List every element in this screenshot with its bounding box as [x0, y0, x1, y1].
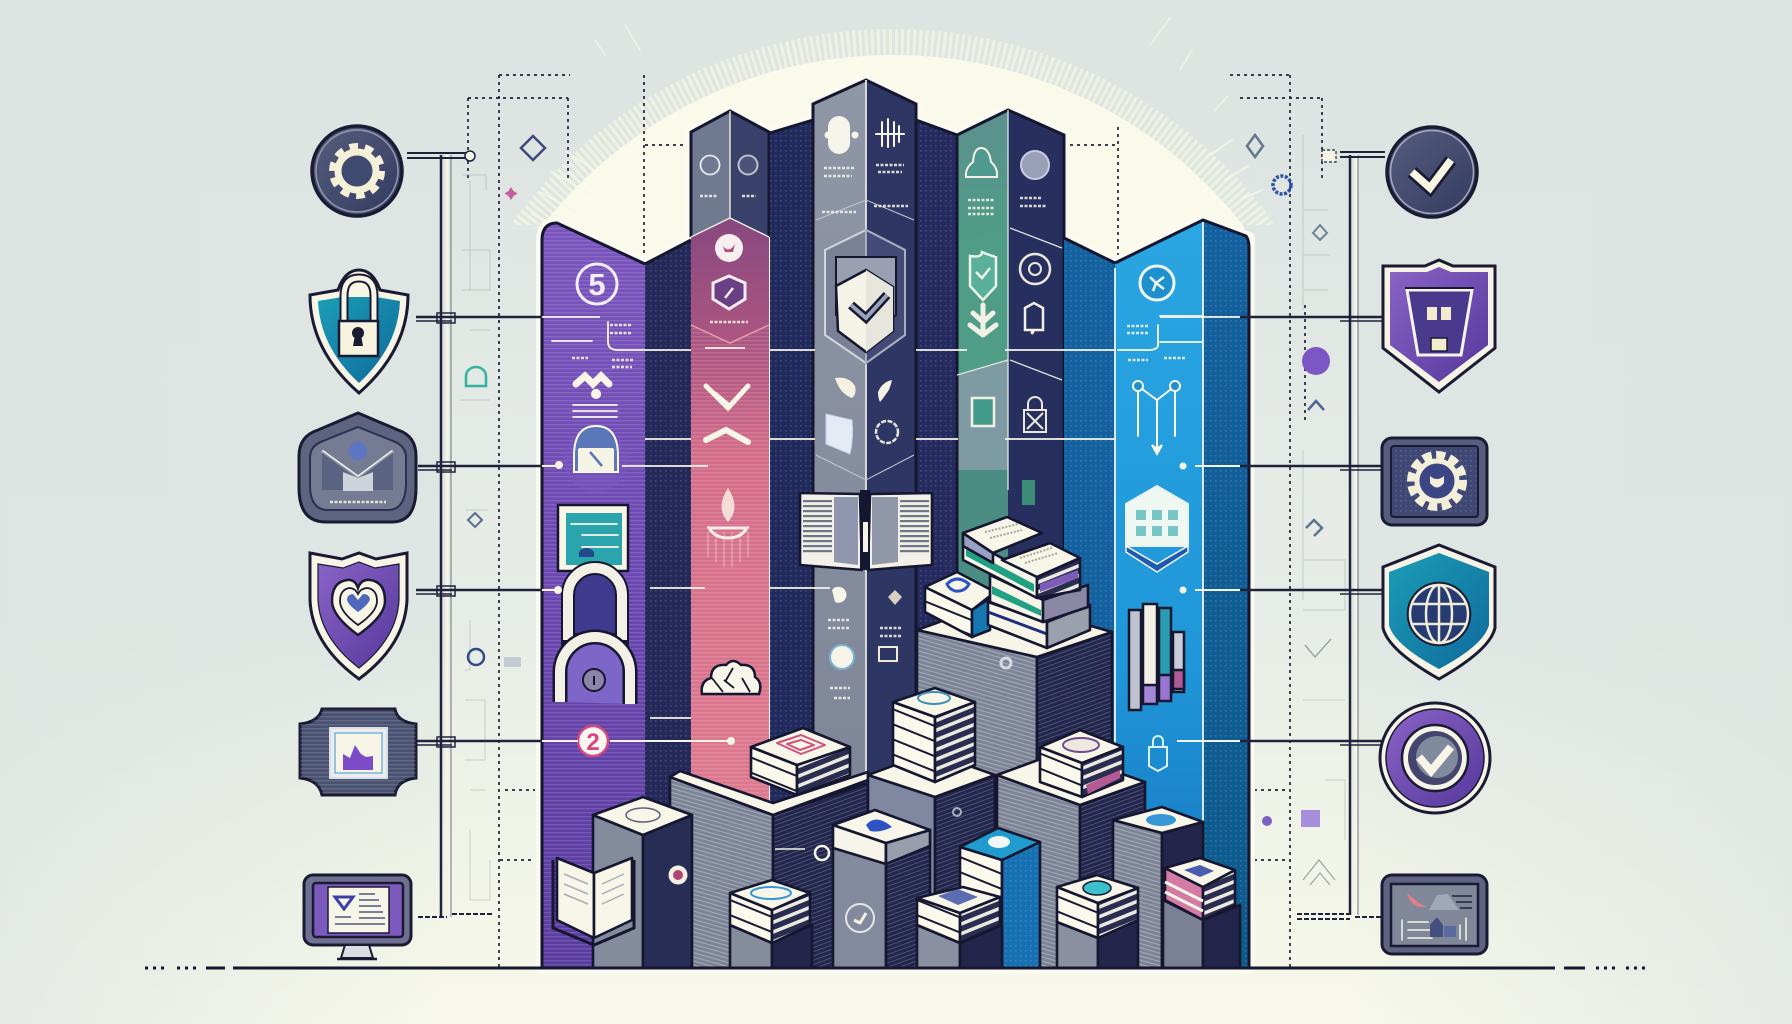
panel: navy column one — [645, 240, 691, 968]
icon: fern — [970, 305, 996, 335]
icon: pink sparkle — [504, 187, 518, 200]
stack: bottom teal — [1057, 875, 1138, 968]
small ring node — [775, 846, 829, 860]
panel: purple pillar — [542, 223, 645, 968]
icon: hex shield — [713, 276, 745, 309]
icon: screen card — [558, 505, 628, 576]
label marks — [572, 325, 634, 367]
icon: dark ring — [1020, 254, 1050, 284]
icon: isometric building — [1126, 486, 1188, 572]
faint ray lines — [708, 532, 748, 567]
sunburst glow behind pillars — [511, 17, 1274, 257]
icon: right check circle — [1387, 127, 1477, 217]
icon: diamond top left — [521, 136, 545, 160]
icon: purple dot — [1302, 347, 1330, 375]
connector lines left — [407, 151, 1115, 917]
label marks — [968, 198, 1046, 214]
stack: bottom right — [1163, 858, 1240, 968]
icon: round mauve badge — [715, 234, 743, 262]
icon: left faint diamond — [468, 513, 482, 527]
icon: book set — [1129, 604, 1184, 710]
number badge 5 — [577, 264, 617, 304]
block: book pile — [925, 517, 1090, 648]
icon: ring mark — [876, 421, 898, 443]
stack: purple ring — [1040, 730, 1123, 797]
block: center — [868, 752, 995, 968]
icon: purple door shield — [1383, 260, 1495, 392]
panel: pink pillar — [691, 111, 769, 968]
lower badges — [828, 587, 902, 698]
icon: grey envelope badge — [299, 413, 416, 522]
panel: navy column three — [916, 120, 957, 968]
icon: faint check — [1305, 639, 1331, 657]
icon: cloud tree — [702, 661, 760, 694]
icon: flame bowl — [709, 488, 747, 538]
icon: monitor — [304, 875, 411, 959]
icon: blue badge — [1273, 176, 1291, 194]
icon: small purple square — [1301, 810, 1320, 827]
icon: capsule glyphs — [824, 116, 904, 154]
block: left large — [670, 771, 868, 968]
icon: teal tag — [466, 367, 486, 386]
icon: network chevron — [573, 376, 617, 417]
bottom book blocks — [553, 490, 1240, 968]
icon: bell tag — [966, 148, 997, 177]
panel: green pillar — [957, 110, 1064, 968]
icon: faint chevrons — [1303, 860, 1335, 885]
stack: pink — [751, 728, 850, 795]
icon: central shield check — [825, 230, 905, 363]
icon: small green tag — [1022, 480, 1035, 505]
icon: map card — [826, 414, 853, 454]
label marks — [710, 321, 748, 323]
tower: striped white — [833, 810, 930, 968]
icon: right angle marker — [1306, 520, 1322, 536]
icon: large padlock — [560, 568, 630, 704]
block: central open book — [800, 490, 932, 570]
panel: dark blue column — [1064, 238, 1115, 968]
badge 2 — [578, 726, 608, 756]
icon: dashboard — [1382, 875, 1487, 954]
panel: bright blue pillar — [1115, 220, 1249, 968]
icon: green card — [972, 398, 994, 426]
icon: gear square — [1382, 438, 1487, 525]
icon: branch tree — [1133, 381, 1180, 454]
icon: caret — [1308, 401, 1324, 410]
icon: grey block — [504, 657, 521, 667]
icon: gear circle — [312, 126, 402, 216]
icon: chevron node — [706, 386, 748, 408]
icon: teal padlock shield — [310, 270, 408, 393]
icon: chart plaque — [300, 709, 416, 795]
icon: purple check ring — [1380, 703, 1490, 813]
icon: backpack lock — [564, 426, 628, 492]
icon: house tag — [1025, 303, 1043, 334]
pillar group — [542, 80, 1249, 968]
number badge 5: 5 — [588, 267, 606, 302]
dotted guide lines and faint blueprint marks — [460, 75, 1345, 968]
book emblem — [947, 579, 969, 591]
icon: open book — [553, 858, 634, 945]
icon: purple heart shield — [310, 553, 407, 679]
panel: navy column two — [770, 120, 813, 968]
small floating icons — [466, 135, 1335, 885]
connector lines right — [1160, 150, 1385, 919]
connector hook — [552, 322, 645, 350]
stack: bottom center — [917, 887, 1002, 968]
icon: small tag lock — [1149, 736, 1167, 771]
icon: lock cross — [1024, 397, 1046, 432]
label marks — [822, 165, 908, 212]
stack: central — [893, 688, 975, 782]
tower: right — [1113, 807, 1203, 968]
panel: central grey pillar — [813, 80, 916, 968]
tower: left cube with book — [593, 797, 692, 968]
label marks — [1127, 326, 1186, 360]
icon: round lens — [1021, 151, 1049, 179]
badge 2: 2 — [586, 729, 600, 756]
tower: blue — [960, 828, 1040, 968]
halo outline — [542, 80, 1249, 968]
icon: header marks — [700, 156, 758, 196]
block: pile platform — [917, 600, 1112, 800]
icon: droplet — [1313, 225, 1327, 240]
block: right — [997, 752, 1145, 968]
stack: bottom left — [730, 880, 812, 968]
icon: leaves — [835, 378, 892, 402]
icon: small purple dot — [1262, 816, 1272, 826]
icon: teal globe shield — [1383, 545, 1495, 679]
connector hook — [1118, 316, 1202, 350]
icon: right diamond — [1247, 135, 1263, 157]
icon: zigzag nodes — [706, 430, 748, 442]
baseline — [145, 966, 1645, 970]
page text marks — [985, 524, 1058, 563]
icon: blue ring mark — [468, 649, 484, 665]
icon: clock circle — [1140, 266, 1174, 300]
icon: green shield check — [970, 252, 996, 300]
